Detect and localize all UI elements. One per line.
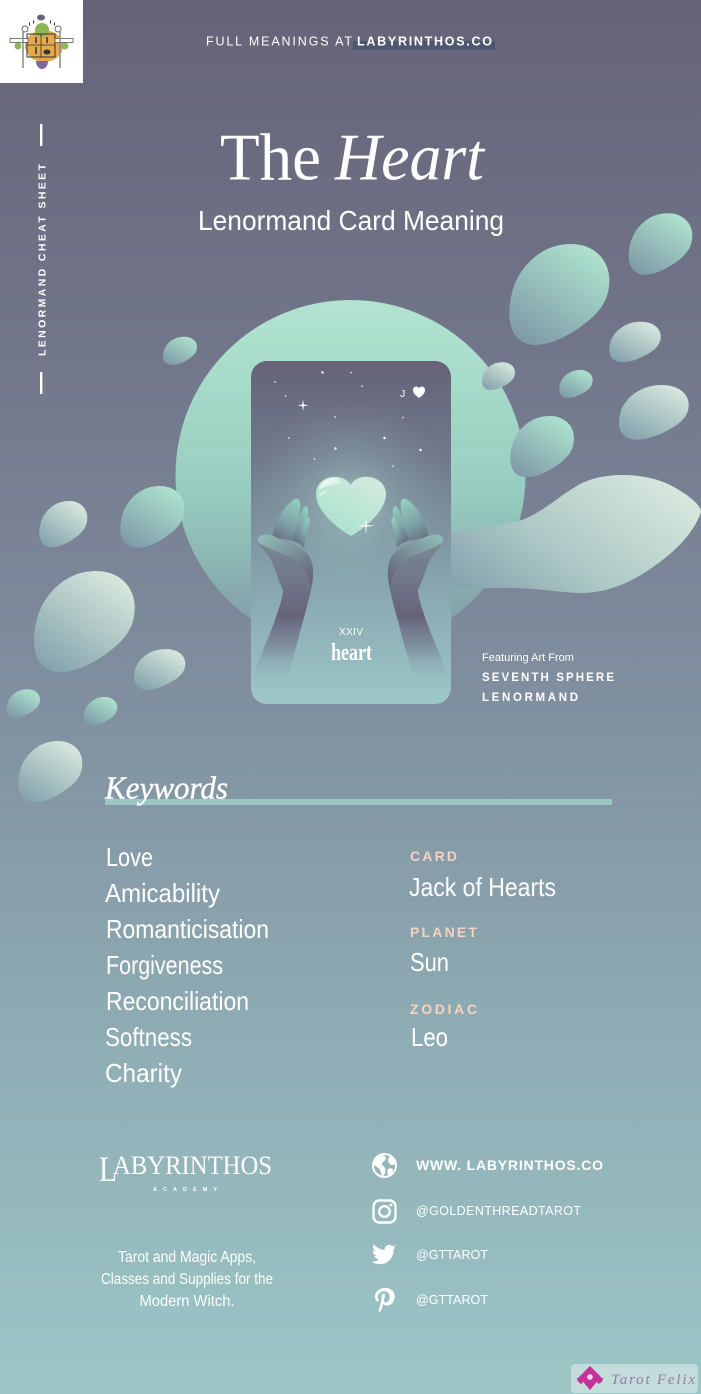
correspondences: Jack of Hearts bbox=[409, 872, 556, 902]
keyword list: Amicability bbox=[105, 878, 220, 908]
keywords heading: Keywords bbox=[104, 770, 228, 806]
correspondences: Leo bbox=[411, 1022, 448, 1052]
card rank and suit bbox=[400, 386, 425, 400]
keyword list: Softness bbox=[105, 1022, 192, 1052]
keyword list: Forgiveness bbox=[106, 950, 223, 980]
tagline: Classes and Supplies for the bbox=[101, 1271, 273, 1288]
labyrinthos academy logo bbox=[99, 1149, 272, 1193]
keyword list bbox=[105, 842, 269, 1088]
card name: heart bbox=[331, 640, 372, 666]
flowing wave shape bbox=[440, 475, 701, 593]
icon: pinterest bbox=[375, 1288, 395, 1313]
glow bbox=[245, 395, 455, 605]
correspondences: ZODIAC bbox=[410, 1001, 477, 1017]
correspondences bbox=[409, 848, 556, 1052]
keyword list: Reconciliation bbox=[106, 986, 249, 1016]
keyword list: Charity bbox=[105, 1058, 182, 1088]
header link text: LABYRINTHOS.CO bbox=[357, 34, 492, 48]
tarot card: heart bbox=[245, 361, 455, 704]
title: The bbox=[220, 120, 321, 194]
card numeral: XXIV bbox=[339, 627, 363, 638]
header link text bbox=[206, 34, 495, 50]
website: WWW. LABYRINTHOS.CO bbox=[416, 1157, 603, 1173]
art credit: LENORMAND bbox=[482, 692, 578, 704]
left hand bbox=[252, 499, 313, 680]
keyword list: Romanticisation bbox=[106, 914, 269, 944]
icon: twitter bbox=[372, 1244, 396, 1264]
stars bbox=[274, 371, 422, 467]
art credit: Featuring Art From bbox=[482, 652, 574, 664]
correspondences: Sun bbox=[410, 947, 449, 977]
logo badge bbox=[0, 0, 83, 83]
header link text: FULL MEANINGS AT bbox=[206, 34, 352, 48]
large circle behind card bbox=[176, 300, 526, 650]
decorative blobs bbox=[7, 213, 692, 802]
keywords heading bbox=[104, 770, 612, 806]
labyrinthos academy logo: ACADEMY bbox=[153, 1187, 217, 1193]
labyrinthos academy logo: ABYRINTHOS bbox=[113, 1151, 272, 1180]
tarot felix badge: Tarot Felix bbox=[611, 1372, 695, 1388]
right hand bbox=[388, 499, 449, 680]
icon: globe bbox=[373, 1154, 396, 1177]
title: Heart bbox=[334, 120, 485, 194]
correspondences: PLANET bbox=[410, 924, 477, 940]
tagline: Modern Witch. bbox=[140, 1293, 234, 1310]
tagline: Tarot and Magic Apps, bbox=[118, 1249, 256, 1266]
sidebar label: LENORMAND CHEAT SHEET bbox=[36, 163, 48, 356]
tagline bbox=[101, 1249, 273, 1310]
card rank and suit: J bbox=[400, 388, 405, 400]
icon: instagram bbox=[374, 1200, 396, 1222]
art credit bbox=[482, 652, 614, 704]
labyrinthos academy logo: L bbox=[99, 1149, 117, 1189]
instagram handle: @GOLDENTHREADTAROT bbox=[416, 1204, 581, 1218]
pinterest handle: @GTTAROT bbox=[416, 1293, 488, 1307]
art credit: SEVENTH SPHERE bbox=[482, 672, 614, 684]
keyword list: Love bbox=[106, 842, 153, 872]
twitter handle: @GTTAROT bbox=[416, 1248, 488, 1262]
tarot felix badge bbox=[571, 1364, 698, 1393]
correspondences: CARD bbox=[410, 848, 457, 864]
title bbox=[220, 120, 485, 194]
subtitle: Lenormand Card Meaning bbox=[198, 205, 504, 236]
glossy heart bbox=[316, 477, 386, 536]
